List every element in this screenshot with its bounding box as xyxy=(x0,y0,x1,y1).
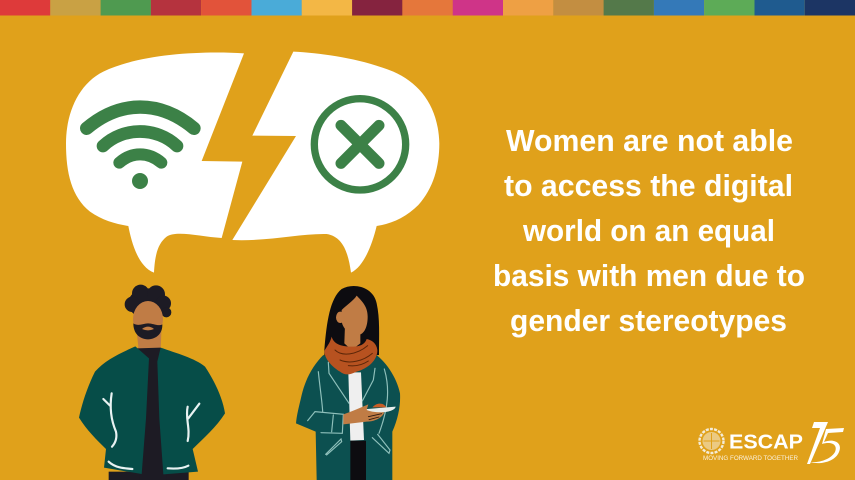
headline text: to access the digital xyxy=(504,168,793,203)
logo tagline: MOVING FORWARD TOGETHER xyxy=(703,455,798,462)
headline text: basis with men due to xyxy=(493,258,805,293)
woman's white shirt xyxy=(348,372,364,441)
logo wordmark: ESCAP xyxy=(729,432,803,454)
headline text: world on an equal xyxy=(522,213,775,248)
split speech bubbles xyxy=(66,52,439,273)
coat seams xyxy=(308,362,390,455)
man's beard xyxy=(133,323,162,339)
illustration: woman xyxy=(296,286,400,480)
icon: wifi signal xyxy=(87,107,194,189)
icon: crossed circle xyxy=(314,99,406,190)
SDG colour strip xyxy=(0,0,855,16)
woman's neck and face xyxy=(344,325,360,350)
man's jacket xyxy=(79,346,149,474)
woman's hand xyxy=(343,404,384,424)
woman's hair xyxy=(324,286,379,357)
woman's trousers xyxy=(350,441,366,480)
woman's scarf xyxy=(324,337,377,374)
icon: UN emblem xyxy=(700,429,724,453)
jacket seams xyxy=(103,393,199,469)
man's hair xyxy=(125,285,171,318)
right speech bubble xyxy=(232,52,439,273)
man's neck and face xyxy=(135,325,165,355)
illustration: man xyxy=(79,285,225,480)
headline text xyxy=(493,123,805,338)
left speech bubble xyxy=(66,53,244,273)
headline text: gender stereotypes xyxy=(510,303,787,338)
man's t-shirt xyxy=(137,348,167,480)
phone in hand xyxy=(372,404,386,407)
man's trousers xyxy=(109,472,189,480)
woman's coat xyxy=(296,355,400,480)
ESCAP 75 logo xyxy=(700,422,844,464)
logo number 75 xyxy=(807,422,844,464)
headline text: Women are not able xyxy=(506,123,793,158)
